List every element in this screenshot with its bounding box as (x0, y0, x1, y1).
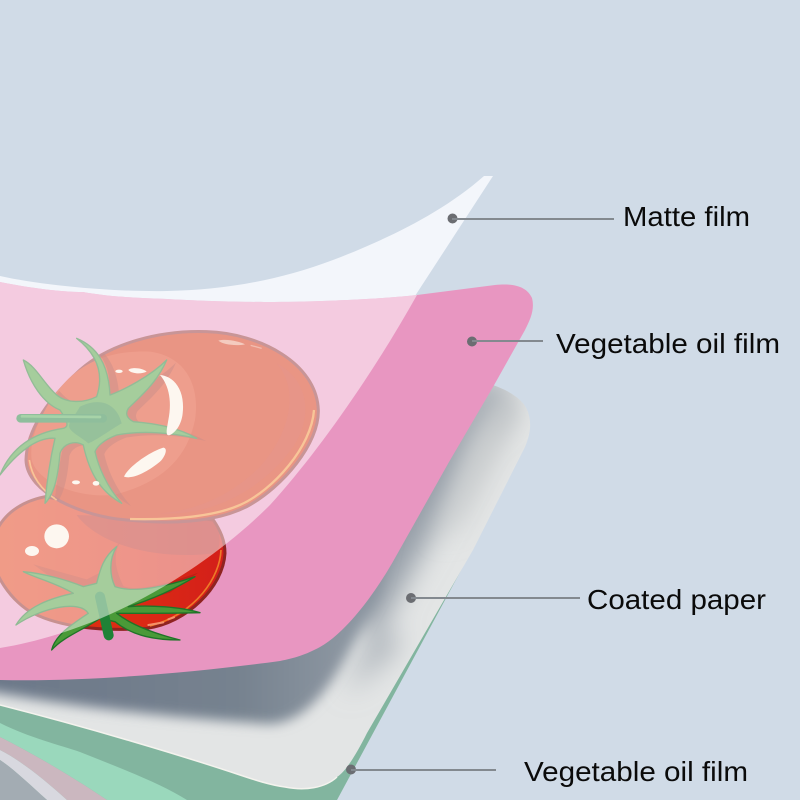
label: matte film (448, 201, 750, 232)
label: matte film: Matte film (623, 201, 750, 232)
bottom layers: lower sheets (0, 550, 472, 800)
calyx shadow on big tomato (55, 354, 204, 506)
tomato highlights (25, 340, 262, 556)
panel: vegetable oil film pink sheet (0, 282, 533, 680)
matte film overlay on pink sheet (0, 270, 430, 648)
big tomato (26, 332, 318, 522)
panel: coated paper sheet (0, 370, 530, 789)
label: vegetable oil film (top) (467, 328, 780, 359)
calyx of small tomato (16, 547, 200, 650)
label: vegetable oil film (bottom): Vegetable oil film (524, 756, 748, 787)
label: coated paper: Coated paper (587, 584, 766, 615)
illustration: tomatoes (0, 332, 318, 650)
label: vegetable oil film (top): Vegetable oil film (556, 328, 780, 359)
calyx of big tomato (0, 338, 197, 503)
panel: matte film crescent (0, 176, 493, 320)
label: vegetable oil film (bottom) (346, 756, 748, 787)
label: coated paper (406, 584, 766, 615)
small tomato (0, 497, 225, 629)
